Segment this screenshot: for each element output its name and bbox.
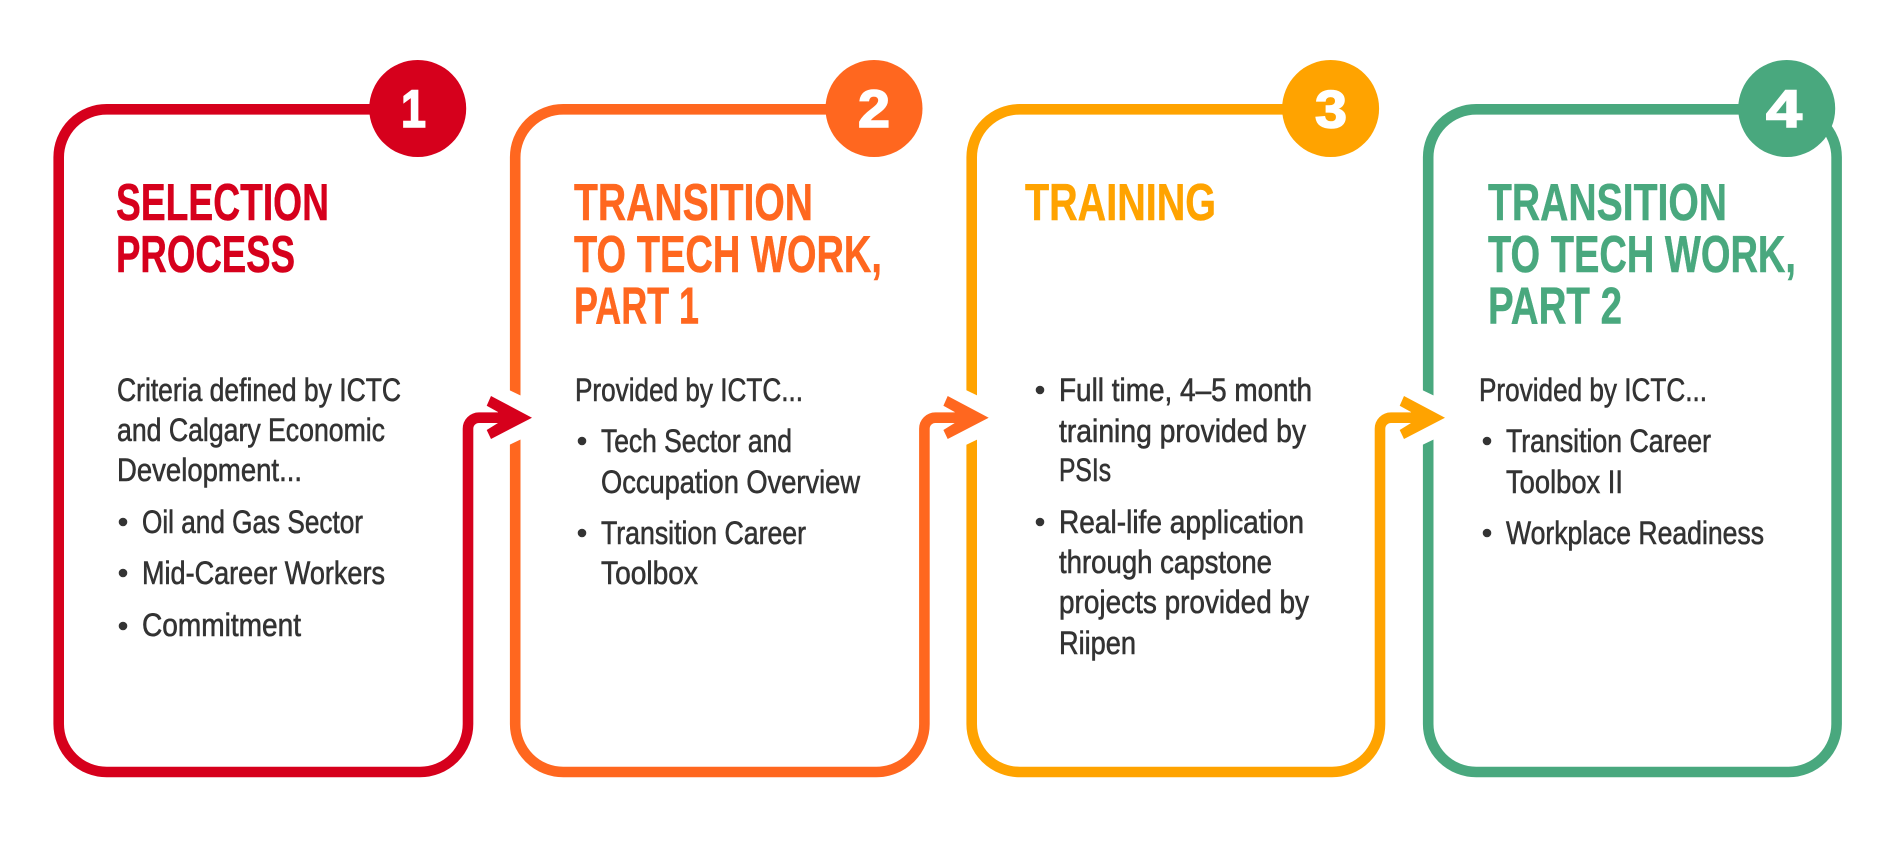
body text (575, 372, 861, 591)
heading: TO TECH WORK, (1488, 226, 1796, 284)
body text: Mid-Career Workers (142, 555, 385, 591)
heading: TRAINING (1025, 174, 1216, 232)
panel: step 4 transition part 2 (1428, 60, 1837, 772)
arrow: step 1 to step 2 (487, 388, 532, 447)
heading (116, 174, 329, 284)
number badge 2 (826, 60, 922, 157)
body text: PSIs (1059, 452, 1111, 488)
card outline with connector to step 3 (515, 109, 956, 772)
heading: PART 2 (1488, 278, 1622, 336)
heading: TRANSITION (1488, 174, 1727, 232)
body text: Oil and Gas Sector (142, 504, 363, 540)
body text: Workplace Readiness (1506, 515, 1764, 551)
body text: Development... (117, 452, 302, 488)
body text: Toolbox (601, 555, 698, 591)
body text: Real-life application (1059, 504, 1304, 540)
body text: projects provided by (1059, 584, 1309, 620)
body text (117, 372, 401, 643)
body text: Provided by ICTC... (1479, 372, 1707, 408)
body text (1479, 372, 1764, 551)
number badge 3 (1282, 60, 1379, 157)
panel: step 3 training (972, 60, 1412, 772)
number badge 4: 4 (1766, 80, 1803, 139)
body text (1036, 372, 1312, 661)
panel: step 2 transition part 1 (515, 60, 956, 772)
body text: Transition Career (1506, 423, 1711, 459)
number badge 3: 3 (1315, 80, 1347, 140)
body text: Criteria defined by ICTC (117, 372, 401, 408)
heading (574, 174, 882, 336)
card outline (1428, 109, 1837, 772)
number badge 2: 2 (858, 80, 890, 139)
body text: Tech Sector and (601, 423, 792, 459)
arrow: step 3 to step 4 (1400, 388, 1445, 447)
heading: PROCESS (116, 226, 295, 284)
panel: step 1 selection process (59, 60, 500, 772)
body text: Commitment (142, 607, 301, 643)
heading (1488, 174, 1796, 336)
body text: through capstone (1059, 544, 1272, 580)
body text: and Calgary Economic (117, 412, 385, 448)
arrow: step 2 to step 3 (943, 388, 989, 447)
body text: Transition Career (601, 515, 806, 551)
body text: Riipen (1059, 625, 1136, 661)
body text: training provided by (1059, 413, 1306, 449)
body text: Full time, 4–5 month (1059, 372, 1312, 408)
body text: Occupation Overview (601, 464, 861, 500)
card outline with connector to step 2 (59, 109, 500, 772)
heading: PART 1 (574, 278, 699, 336)
body text: Provided by ICTC... (575, 372, 803, 408)
heading: TRANSITION (574, 174, 813, 232)
heading: SELECTION (116, 174, 329, 232)
body text: Toolbox II (1506, 464, 1623, 500)
number badge 1 (369, 60, 466, 157)
heading: TO TECH WORK, (574, 226, 882, 284)
card outline with connector to step 4 (972, 109, 1412, 772)
number badge 4 (1738, 60, 1835, 157)
number badge 1: 1 (401, 80, 426, 139)
